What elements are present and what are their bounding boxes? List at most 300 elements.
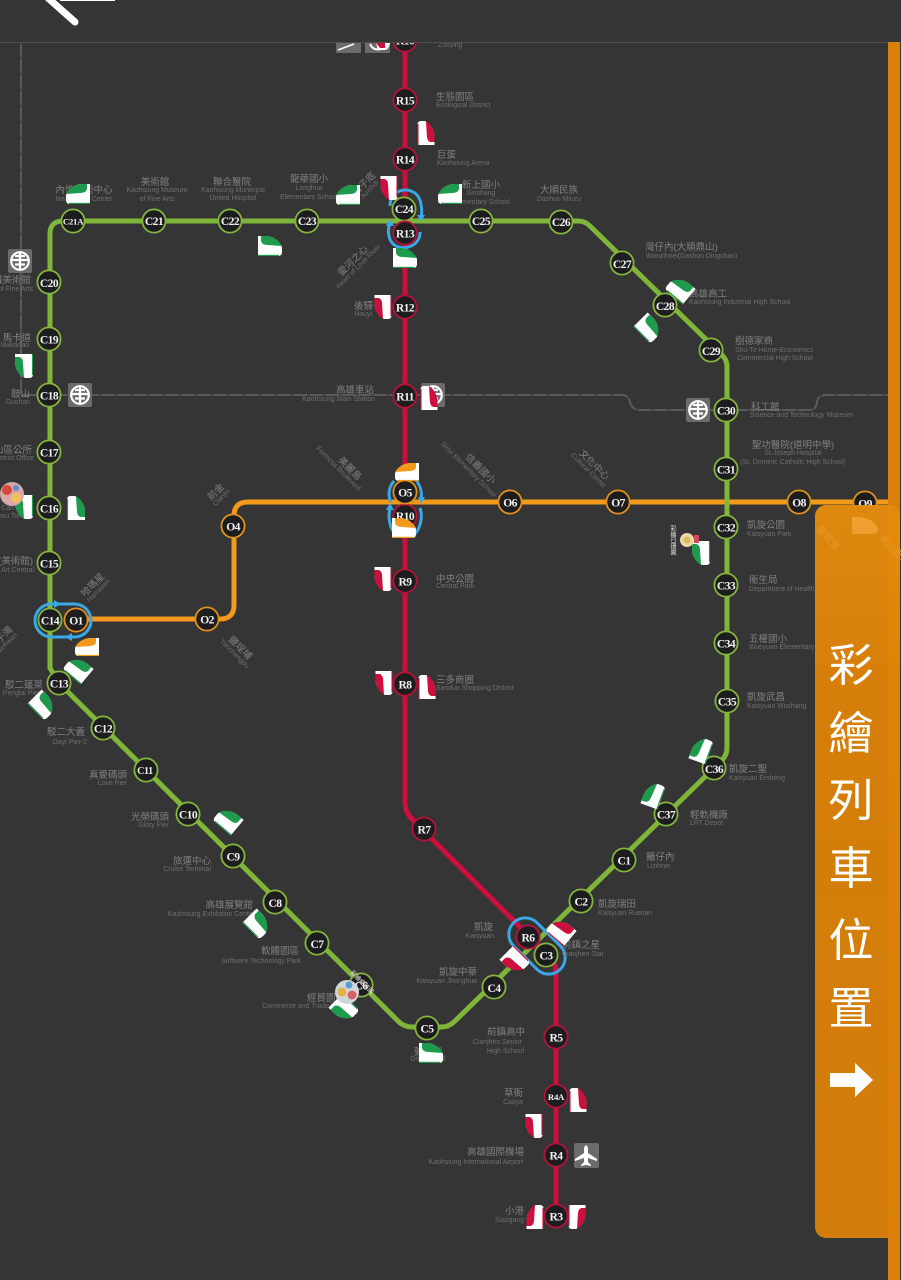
label: Dashun Minzu: Dashun Minzu [537, 196, 581, 203]
label: Cianjhen Star: Cianjhen Star [562, 951, 604, 958]
station C29: C29 [702, 345, 721, 358]
station C6: C6 [355, 980, 368, 992]
train green [692, 541, 710, 565]
label: Longhua: 龍華國小 [290, 173, 328, 185]
label: Senior High: High School [487, 1048, 524, 1055]
station R14 [393, 147, 417, 171]
label: Wanzihnei: Wanzihnei(Dashun Dingshan) [646, 253, 737, 260]
label: Software Park: Software Technology Park [221, 958, 302, 965]
label: Longhua [280, 173, 338, 201]
station O4: O4 [226, 520, 241, 534]
train green [27, 689, 59, 721]
label: Ruitian: Kaisyuan Ruetian [598, 910, 652, 917]
station C11: C11 [137, 766, 153, 777]
station R3: R3 [550, 1210, 563, 1224]
train green [438, 184, 462, 204]
station C19 [37, 327, 61, 351]
header band [0, 0, 901, 42]
transfer ring: C14 O1 [35, 600, 91, 641]
station C32 [714, 515, 738, 539]
label: Neiwei Arts Center [55, 184, 113, 203]
label: Lizihnei [646, 851, 675, 870]
train red [380, 176, 398, 200]
label: Glory Pier [131, 811, 170, 829]
station O9 [853, 491, 877, 515]
station C3: C3 [540, 950, 553, 962]
station R10 [393, 504, 417, 528]
train red [374, 567, 392, 591]
label: Industrial High School: Kaohsiung Industrial High School [689, 299, 791, 306]
label: Main Station [302, 384, 375, 403]
transfer ring: R6 C3 [502, 911, 572, 981]
station C21: C21 [145, 215, 164, 228]
label: Art Central [0, 555, 34, 574]
icon: high speed rail cut off at top [336, 43, 361, 53]
label: Ecological District: 生態園區 [436, 91, 475, 103]
train green [640, 781, 666, 809]
icon: painted train character south [335, 980, 359, 1004]
label: Cianjin rotated: Cianjin [212, 488, 232, 508]
red line [405, 42, 556, 1216]
label: Central Park [436, 573, 475, 590]
panel heading [828, 640, 874, 1034]
station O5: O5 [398, 486, 413, 500]
label: Neiwei Arts Center: Neiwei Arts Center [55, 196, 113, 203]
station C30 [714, 398, 738, 422]
station C28 [653, 293, 677, 317]
label: Health [749, 574, 815, 593]
station C34 [714, 631, 738, 655]
label: Museum [127, 176, 188, 203]
label: Ecological District [436, 91, 490, 109]
label: Love Pier: 真愛碼頭 [89, 769, 127, 781]
label: Lizihnei: 籬仔內 [646, 851, 675, 863]
station C11 [134, 758, 158, 782]
label: Senior High [473, 1026, 525, 1055]
train green [419, 1043, 443, 1063]
train green [336, 185, 360, 205]
label: LRT Depot [690, 809, 729, 827]
station C18: C18 [40, 390, 59, 402]
train green [664, 274, 696, 304]
label: Jhonghua [416, 966, 477, 985]
label: Wanzihnei [645, 241, 737, 260]
label: Caoya: Caoya [503, 1099, 523, 1106]
label: Kaohsiung Arena: Kaohsiung Arena [437, 160, 490, 167]
label: Kaisyuan: 凱旋 [474, 921, 493, 933]
label: Wucyuan: 五權國小 [749, 633, 788, 645]
station R10: R10 [396, 510, 415, 523]
label: Siaogang [495, 1205, 524, 1224]
station C33 [714, 573, 738, 597]
label: Love Pier [89, 769, 128, 787]
label: Kaisyuan [466, 921, 494, 940]
label: Dayi Pier: 駁二大義 [47, 726, 85, 738]
station C32: C32 [717, 522, 736, 534]
panel heading: 彩 [828, 640, 874, 691]
transfer ring: O5 R10 [386, 480, 425, 535]
label: Makadao: 馬卡道 [2, 332, 31, 344]
icon: back arrow [48, 0, 115, 22]
station O5 [393, 480, 417, 504]
label: Health: 衛生局 [749, 574, 778, 586]
label: Cultural Center rotated [569, 444, 615, 490]
label: Makadao [1, 332, 31, 349]
train green [66, 184, 90, 204]
label: Caoya [503, 1087, 523, 1106]
station C22 [218, 209, 242, 233]
label: Houyi [354, 300, 373, 318]
label: United Hospital [201, 176, 265, 202]
label: Sinshang: Elementary School [452, 199, 510, 206]
train red [420, 386, 438, 410]
label: Cruise [163, 855, 211, 873]
label: Shu-Te: Shu-Te Home-Economics [735, 347, 814, 354]
label: Exhibition: Kaohsiung Exhibition Center [168, 911, 256, 918]
label: Glory Pier: Glory Pier [138, 822, 170, 829]
station R9 [393, 569, 417, 593]
station R6: R6 [522, 932, 535, 944]
train orange [392, 518, 416, 538]
station C23: C23 [298, 215, 317, 228]
station C9 [221, 844, 245, 868]
label: Kaisyuan Park: Kaisyuan Park [747, 531, 792, 538]
train orange [395, 463, 419, 481]
label: Shu-Te: 樹德家商 [735, 335, 773, 347]
green line [50, 221, 727, 1027]
label: Kaisyuan Park: 凱旋公園 [747, 519, 785, 531]
station C29 [699, 338, 723, 362]
label: Makadao: Makadao [1, 342, 29, 349]
label: Penglai Pier [3, 679, 43, 697]
station C34: C34 [717, 638, 736, 650]
station R8 [393, 672, 417, 696]
label: Health: Department of Health [749, 586, 815, 593]
station R15: R15 [396, 94, 415, 108]
station O2 [195, 607, 219, 631]
train green [393, 248, 417, 268]
label: Industrial High School [689, 288, 791, 306]
label: Sinyi rotated: Sinyi Elementary School [439, 441, 497, 499]
station R5: R5 [550, 1032, 563, 1044]
label: St.Joseph [740, 439, 846, 466]
station R11 [393, 384, 417, 408]
label: Commerce: 經貿園區 [307, 992, 345, 1004]
station C17: C17 [40, 446, 59, 460]
label: Lizihnei: Lizihnei [647, 863, 671, 870]
station R16 [393, 28, 417, 52]
label: Cruise: 旅運中心 [173, 855, 211, 867]
label: Exhibition: 高雄展覽館 [205, 899, 253, 911]
station C25 [469, 209, 493, 233]
label: Yanchengpu rotated [218, 630, 258, 670]
station C19: C19 [40, 334, 59, 346]
label: Wuchang: 凱旋武昌 [747, 691, 785, 703]
station C3 [534, 943, 558, 967]
label: Commerce: Commerce and Trade Park [262, 1003, 346, 1010]
station R4: R4 [550, 1150, 563, 1162]
train green [62, 654, 94, 684]
train red [570, 1088, 586, 1112]
station C37 [654, 802, 678, 826]
station C10 [176, 802, 200, 826]
label: Heart of Love River rotated: 愛河之心 [335, 243, 371, 279]
label: Ruitian: 凱旋瑞田 [598, 898, 636, 910]
label: Penglai Pier: 駁二蓬萊 [5, 679, 43, 691]
label: United Hospital: Kaohsiung Municipal [201, 187, 265, 194]
station R4A: R4A [548, 1092, 565, 1102]
station C22: C22 [221, 215, 240, 228]
label: Cultural Center rotated: 文化中心 [576, 447, 612, 483]
label: Kaohsiung Arena [437, 150, 490, 167]
label: Aozihdi rotated: Aozihdi [359, 179, 381, 200]
station R16: R16 [396, 34, 415, 48]
station C14 [38, 608, 62, 632]
train red [376, 671, 392, 695]
icon: painted train character west [0, 482, 24, 506]
station R9: R9 [399, 576, 412, 588]
label: LRT Depot: LRT Depot [690, 820, 723, 827]
train red [545, 916, 577, 946]
label: Sanduo [436, 674, 514, 692]
station O7 [606, 490, 630, 514]
label: Central Park: 中央公園 [436, 573, 474, 585]
green line stations [37, 197, 739, 1040]
header divider [0, 42, 901, 43]
label: Senior High: Cianjhen Senior [473, 1039, 523, 1046]
icon: railway station Science Museum [686, 398, 710, 422]
station C9: C9 [227, 850, 240, 864]
label: Jhonghua: 凱旋中華 [439, 966, 477, 978]
icon: railway station Gushan [68, 383, 92, 407]
label: St.Joseph: St.Joseph Hospital [764, 450, 822, 457]
label: Science Museum: Science and Technology Museum [750, 412, 853, 419]
label: Industrial High School: 高雄高工 [689, 288, 728, 300]
station C35: C35 [718, 696, 737, 708]
label: Software Park [221, 945, 302, 965]
label: Gushan: 鼓山 [11, 388, 30, 400]
station C26 [549, 210, 573, 234]
train green [258, 236, 282, 256]
station O8 [787, 490, 811, 514]
station C16: C16 [40, 502, 59, 516]
station C13: C13 [50, 678, 69, 690]
label: Cruise: Cruise Terminal [163, 866, 211, 873]
label: Wuchang: Kaisyuan Wuchang [747, 703, 806, 710]
railway dashed line [21, 44, 888, 410]
station C31 [714, 457, 738, 481]
label: Neiwei Arts Center: 內惟藝術中心 [55, 184, 113, 196]
station C30: C30 [717, 404, 736, 418]
label: Museum: Kaohsiung Museum [127, 187, 188, 194]
label: Cianjhen Star: 前鎮之星 [562, 939, 600, 951]
panel: train position tab [814, 505, 901, 1238]
train red [499, 945, 531, 977]
station C25: C25 [472, 215, 491, 228]
station R8: R8 [399, 678, 412, 692]
train orange [75, 638, 99, 656]
station C21A: C21A [63, 216, 84, 226]
label: Houyi: 後驛 [354, 300, 373, 312]
label: Airport [429, 1146, 524, 1166]
train green [15, 354, 33, 378]
label: Ersheng: 凱旋二聖 [729, 763, 767, 775]
train green [67, 496, 85, 520]
arrow right [830, 1063, 873, 1097]
station R5 [544, 1025, 568, 1049]
faint labels under panel: 衛武營 [814, 524, 842, 552]
label: Dream Mall [410, 1046, 446, 1063]
station O8: O8 [792, 496, 807, 510]
station R6 [516, 925, 540, 949]
station R4 [544, 1143, 568, 1167]
label: Glory Pier: 光榮碼頭 [131, 811, 169, 823]
label: Longhua: Elementary School [280, 194, 338, 201]
label: United Hospital: United Hospital [210, 195, 257, 202]
faint labels under panel [814, 524, 901, 568]
train red [418, 675, 436, 699]
label: St.Joseph: 聖功醫院(道明中學) [752, 439, 834, 451]
label: Cianjin rotated [204, 480, 232, 508]
station C33: C33 [717, 580, 736, 592]
panel heading: 列 [828, 775, 874, 826]
label: Dashun Minzu: 大順民族 [540, 184, 578, 196]
station C2 [569, 889, 593, 913]
label: Science Museum [750, 401, 853, 419]
station C12: C12 [94, 722, 113, 736]
label: Ersheng: Kaisyuan Ersheng [729, 775, 785, 782]
label: Wuchang [747, 691, 806, 710]
station C2: C2 [575, 896, 588, 908]
station C18 [37, 383, 61, 407]
label: Dream Mall: Dream Mall [410, 1056, 446, 1063]
station O6: O6 [503, 496, 518, 510]
station C5 [415, 1016, 439, 1040]
station C17 [37, 440, 61, 464]
label: Senior High: 前鎮高中 [487, 1026, 525, 1038]
station O4 [221, 514, 245, 538]
train green [15, 495, 33, 519]
station C37: C37 [657, 808, 676, 822]
station C7: C7 [311, 938, 324, 951]
train green [688, 736, 714, 764]
train red [526, 1114, 542, 1138]
label: Main Station: 高雄車站 [336, 384, 374, 396]
station O2: O2 [200, 614, 215, 626]
station C12 [91, 716, 115, 740]
label: Museum of Fine Arts west [0, 274, 34, 293]
station R7 [412, 817, 436, 841]
label: Central Park: Central Park [436, 583, 475, 590]
label: Zuoying: Zuoying [438, 42, 463, 49]
station C1: C1 [618, 854, 631, 868]
train green [633, 312, 665, 344]
label: Houyi: Houyi [354, 311, 372, 318]
train red [418, 121, 434, 145]
train red [526, 1205, 544, 1229]
station C36 [702, 756, 726, 780]
train red [568, 1205, 586, 1229]
station O6 [498, 490, 522, 514]
station C27 [610, 251, 634, 275]
panel heading: 車 [828, 843, 874, 894]
station R7: R7 [418, 824, 431, 836]
label: Wanzihnei: 灣仔內(大順鼎山) [645, 241, 718, 253]
station O1 [64, 608, 88, 632]
train red [374, 295, 392, 319]
label: United Hospital: 聯合醫院 [213, 176, 251, 188]
label: LRT Depot: 輕軌機廠 [690, 809, 729, 821]
label: Main Station: Kaohsiung Main Station [302, 396, 375, 403]
label: Aozihdi rotated: 凹子底 [350, 169, 379, 198]
station C23 [295, 209, 319, 233]
orange line stations [64, 480, 877, 632]
label: District Office [0, 444, 34, 462]
station C36: C36 [705, 763, 724, 776]
label: Sinyi rotated: 信義國小 [463, 451, 499, 487]
train green [242, 908, 274, 940]
station R13: R13 [396, 228, 415, 240]
icon: railway station Zuoying [365, 43, 390, 53]
label: Cianjhen Star [562, 939, 604, 958]
panel heading: 置 [828, 983, 874, 1034]
station C20 [37, 270, 61, 294]
label: Formosa rotated: 美麗島 [335, 454, 364, 483]
station C1 [612, 848, 636, 872]
vertical caption: painted train: 彩繪日環圖 [669, 524, 676, 556]
station O9: O9 [858, 498, 873, 510]
label: Sanduo: 三多商圈 [436, 674, 474, 686]
label: Wucyuan [749, 633, 815, 651]
label: Kaisyuan Park [747, 519, 792, 538]
label: Yanchengpu rotated: 鹽埕埔 [226, 634, 255, 663]
station C21A [61, 209, 85, 233]
caption: painted train at C6: 彩繪經貿圖 [349, 969, 375, 996]
label: Airport: Kaohsiung International Airport [429, 1159, 523, 1166]
transfer ring: C24 R13 [386, 190, 425, 248]
label: Dayi Pier: Dayi Pier-2 [53, 739, 87, 746]
train green [328, 993, 360, 1025]
station C15: C15 [40, 558, 59, 570]
station C15 [37, 551, 61, 575]
label: Commerce [262, 992, 346, 1010]
label: Cultural Center rotated: Cultural Center [569, 452, 607, 490]
icon: railway station Kaohsiung Main [421, 383, 445, 407]
station C24 [392, 197, 416, 221]
label: Hamasen rotated: 哈瑪星 [79, 571, 107, 599]
label: Ersheng [729, 763, 785, 782]
label: Ecological District: Ecological District [436, 102, 490, 109]
faint train under panel [852, 517, 878, 534]
label: Gushan: Gushan [6, 399, 30, 406]
station C14: C14 [41, 614, 60, 628]
red line stations [393, 28, 568, 1228]
label: Hamasen rotated: Hamasen [86, 578, 112, 604]
label: Jhonghua: Kaisyuan Jhonghua [416, 978, 477, 985]
station C24: C24 [395, 203, 414, 216]
station C28: C28 [656, 300, 675, 313]
label: Ruitian [598, 898, 652, 917]
label: Sanduo: Sanduo Shopping District [436, 685, 514, 692]
panel heading: 位 [828, 915, 874, 966]
label: Kaohsiung Arena: 巨蛋 [437, 150, 457, 161]
station C4: C4 [488, 982, 501, 995]
label: C16: Can [1, 505, 14, 512]
station C8: C8 [269, 897, 282, 910]
station C16 [37, 496, 61, 520]
label: Dayi Pier [47, 726, 87, 746]
label: Yanchengpu rotated: Yanchengpu [218, 638, 250, 670]
